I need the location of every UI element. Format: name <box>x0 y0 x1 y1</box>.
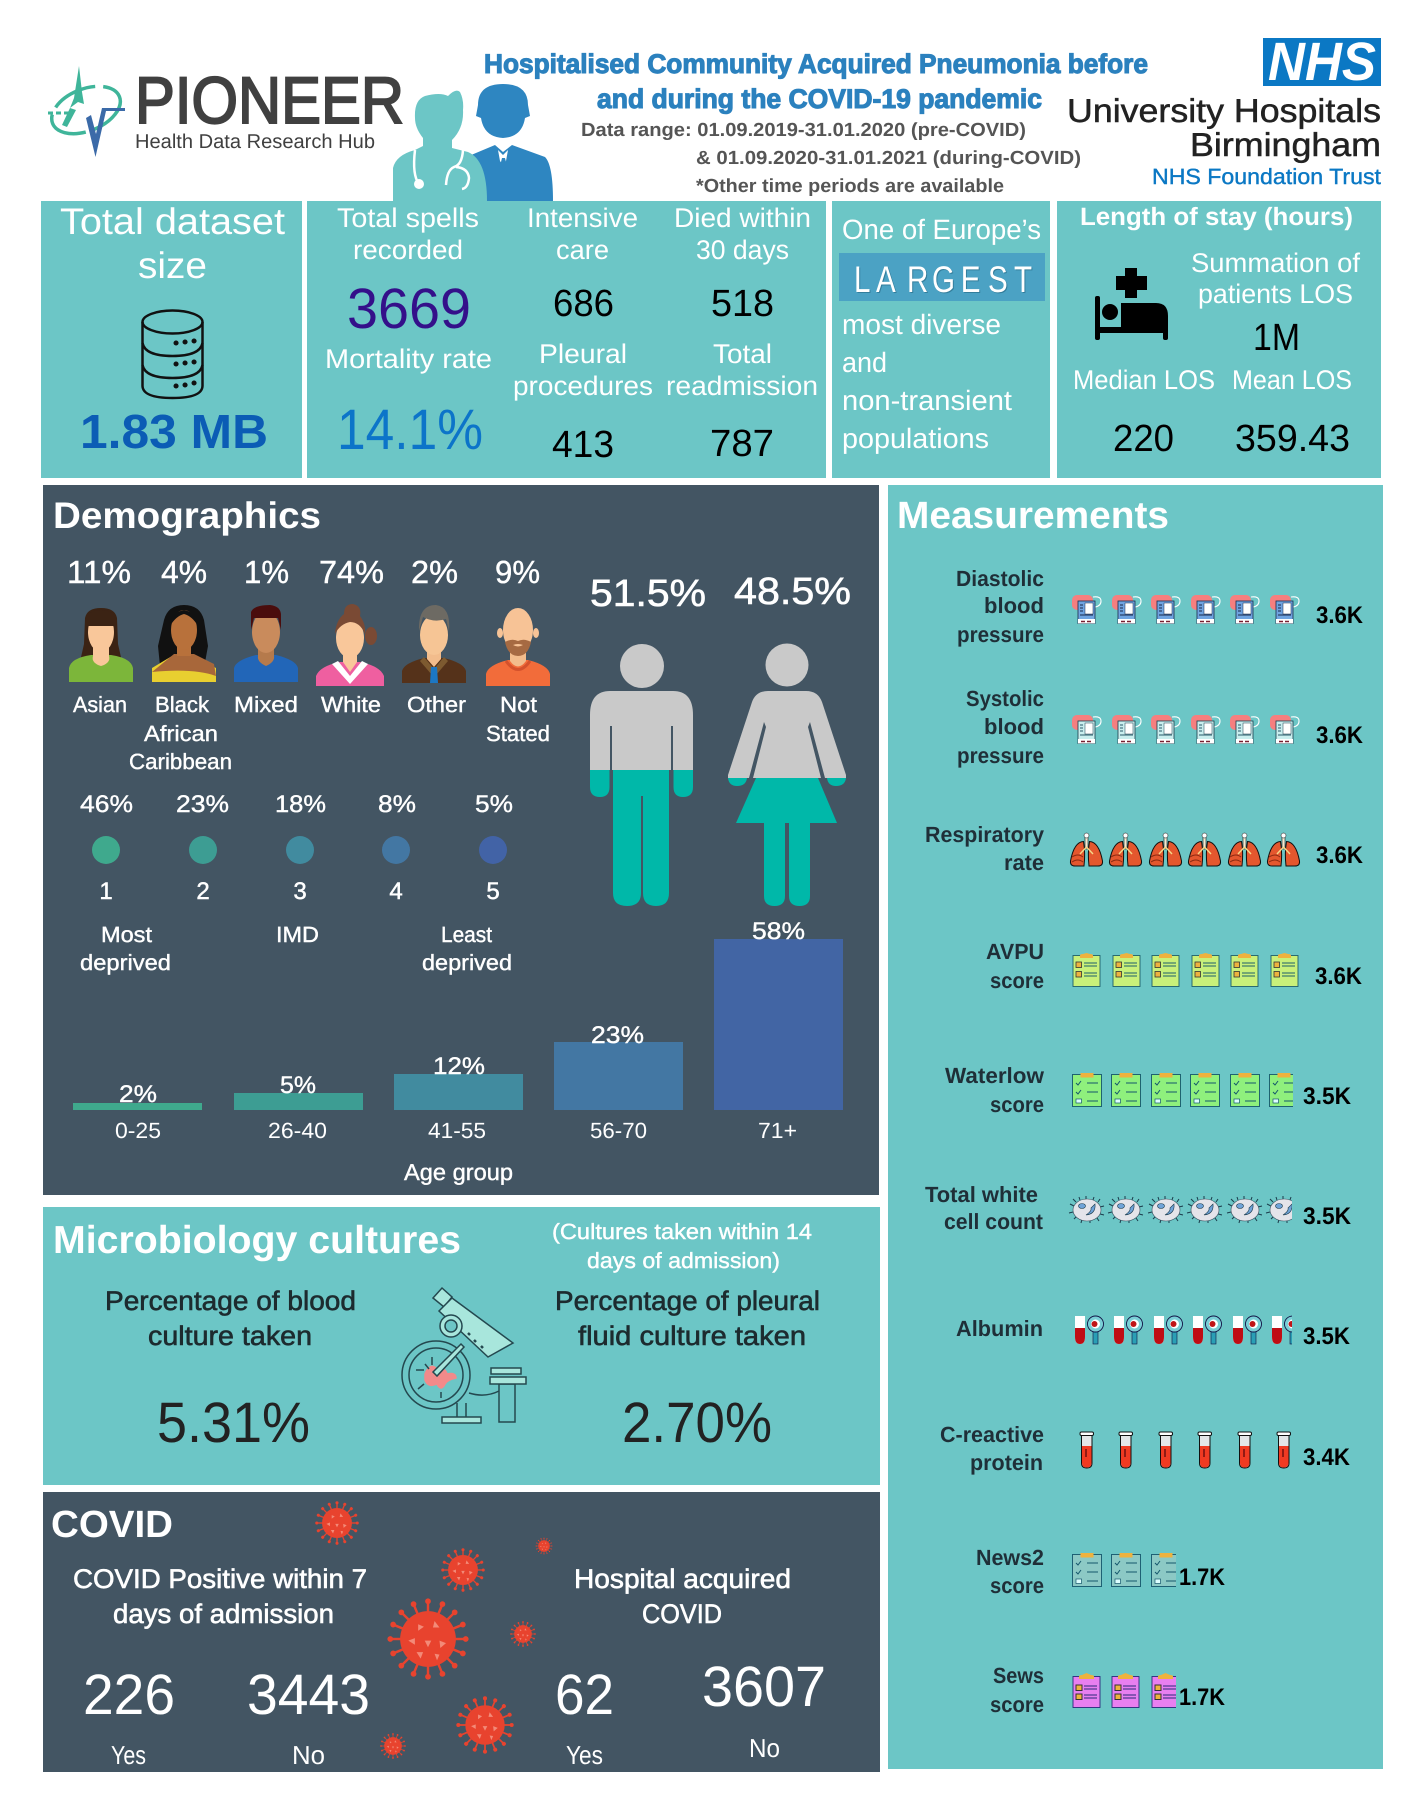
NHS badge: NHS <box>1268 32 1376 92</box>
title <box>484 49 1148 114</box>
stat: hospital acquired COVID: Yes <box>566 1740 603 1770</box>
stat: mortality rate: 14.1% <box>337 398 483 462</box>
row: total white cell count: 3.5K <box>1303 1203 1352 1230</box>
icon: hospital bed <box>1095 268 1168 340</box>
stat: pleural procedures: Pleural <box>539 339 627 369</box>
row: Waterlow score: 3.5K <box>1303 1083 1352 1110</box>
stat: mortality rate <box>325 344 492 462</box>
IMD percentages: 23% <box>176 791 229 818</box>
badge: largest: LARGEST <box>854 259 1032 300</box>
row: Waterlow score: score <box>990 1092 1044 1117</box>
IMD numbers: 1 <box>99 878 113 905</box>
stat: pleural fluid culture: Percentage of pleural <box>555 1286 820 1316</box>
stat: died within 30 days: 30 days <box>696 235 789 265</box>
stat: COVID positive within 7 days: days of admission <box>113 1599 334 1629</box>
text: most diverse populations: and <box>842 347 887 378</box>
stat: intensive care: care <box>556 235 609 265</box>
stat: median LOS <box>1073 365 1215 460</box>
logo: NHS University Hospitals Birmingham <box>1067 32 1381 189</box>
heading: Total dataset <box>60 201 286 242</box>
axis labels: 41-55 <box>428 1118 486 1143</box>
panel: COVID <box>43 1492 880 1772</box>
ethnicity percentages: 1% <box>244 554 289 590</box>
IMD percentages: 46% <box>80 791 133 818</box>
bar value labels <box>119 918 805 1108</box>
stat: COVID positive within 7 days: COVID Positive within 7 <box>73 1564 367 1594</box>
row: Sews score: Sews <box>993 1663 1044 1688</box>
IMD captions: deprived <box>80 950 171 975</box>
row: AVPU score: AVPU <box>986 939 1044 964</box>
stat: blood culture <box>105 1286 356 1455</box>
row: total white cell count: cell count <box>944 1209 1044 1234</box>
ethnicity labels: Black <box>155 692 210 717</box>
stat: blood culture: culture taken <box>148 1321 312 1351</box>
text: one of Europe's: One of Europe’s <box>842 214 1041 245</box>
row: News2 score: 1.7K <box>1179 1564 1226 1591</box>
stat: dataset size: 1.83 MB <box>80 406 268 459</box>
female figure <box>728 571 851 906</box>
axis labels: 26-40 <box>268 1118 327 1143</box>
heading: Length of stay (hours) <box>1080 203 1353 231</box>
text: most diverse populations: non-transient <box>842 385 1012 416</box>
row: diastolic blood pressure <box>956 566 1364 647</box>
stat: blood culture: 5.31% <box>157 1391 310 1455</box>
row: albumin: 3.5K <box>1303 1323 1351 1350</box>
stat: median LOS: 220 <box>1113 418 1174 460</box>
stat: hospital acquired COVID: Hospital acquired <box>574 1564 791 1594</box>
note: days of admission) <box>587 1248 780 1273</box>
panel: largest most diverse <box>832 201 1050 478</box>
wordmark: PIONEER <box>135 63 404 137</box>
ethnicity labels: Caribbean <box>129 749 232 774</box>
IMD percentages: 18% <box>275 791 326 818</box>
ethnicity labels <box>73 692 550 774</box>
stat: intensive care <box>527 203 638 325</box>
row: diastolic blood pressure: pressure <box>957 622 1044 647</box>
ethnicity percentages: 11% <box>67 554 131 590</box>
ethnicity labels: White <box>321 692 381 717</box>
row: systolic blood pressure: 3.6K <box>1316 722 1364 749</box>
row: Sews score: score <box>990 1692 1044 1717</box>
heading: Microbiology cultures <box>53 1219 461 1262</box>
row: AVPU score: score <box>990 968 1044 993</box>
stat: intensive care: 686 <box>553 283 614 325</box>
stat: summation of LOS: 1M <box>1253 317 1300 359</box>
stat: summation of LOS: patients LOS <box>1198 279 1353 309</box>
IMD captions: Most <box>101 922 152 947</box>
stat: summation of LOS <box>1191 248 1361 359</box>
IMD deprivation scale <box>80 791 513 975</box>
logo: PIONEER Health Data Research Hub <box>45 63 404 157</box>
row: C-reactive protein: 3.4K <box>1303 1444 1351 1471</box>
title: Hospitalised Community Acquired Pneumonia before <box>484 49 1148 79</box>
stat: summation of LOS: Summation of <box>1191 248 1361 278</box>
bar value labels: 2% <box>119 1081 157 1108</box>
row: albumin <box>956 1316 1350 1344</box>
bar value labels: 12% <box>433 1053 485 1080</box>
stat: intensive care: Intensive <box>527 203 638 233</box>
icon: Not Stated avatar <box>486 608 550 686</box>
ethnicity percentages: 74% <box>319 554 384 590</box>
stat: COVID positive within 7 days: 226 <box>83 1663 175 1727</box>
heading <box>60 201 286 286</box>
row: respiratory rate <box>925 822 1364 875</box>
stat: pleural procedures: 413 <box>552 424 614 466</box>
stat: hospital acquired COVID: COVID <box>642 1599 722 1629</box>
axis labels <box>115 1118 797 1143</box>
ethnicity labels: Not <box>500 692 537 717</box>
male figure: 51.5% <box>590 573 706 615</box>
stat: pleural procedures <box>513 339 653 466</box>
axis labels: 56-70 <box>590 1118 647 1143</box>
row: Sews score: 1.7K <box>1179 1684 1226 1711</box>
stat: hospital acquired COVID <box>555 1564 826 1770</box>
stat: total readmission <box>666 339 818 465</box>
axis labels: 71+ <box>758 1118 797 1143</box>
stat: died within 30 days: Died within <box>674 203 811 233</box>
row: systolic blood pressure: blood <box>984 714 1044 739</box>
stat: mortality rate: Mortality rate <box>325 344 492 374</box>
ethnicity labels: Other <box>407 692 466 717</box>
badge: largest: LARGEST <box>855 260 1033 301</box>
stat: mean LOS <box>1232 365 1352 460</box>
icon: virus particles <box>315 1501 552 1759</box>
IMD numbers: 3 <box>293 878 307 905</box>
stat: total readmission: readmission <box>666 371 818 401</box>
ethnicity labels: Stated <box>486 721 550 746</box>
stat: total readmission: Total <box>713 339 772 369</box>
row: systolic blood pressure: Systolic <box>966 686 1044 711</box>
panel: measurements <box>888 485 1383 1769</box>
bar value labels: 23% <box>591 1022 644 1049</box>
panel: total dataset size <box>41 201 302 478</box>
stat: hospital acquired COVID: 62 <box>555 1663 614 1727</box>
chart: age group bars <box>73 918 843 1185</box>
male figure <box>590 573 706 906</box>
stat: hospital acquired COVID: No <box>749 1733 780 1763</box>
IMD numbers: 5 <box>486 878 500 905</box>
row: C-reactive protein: protein <box>970 1450 1043 1475</box>
stat: died within 30 days: 518 <box>711 283 774 325</box>
row: respiratory rate: rate <box>1004 850 1044 875</box>
chart: gender split figures <box>590 571 851 906</box>
stat: pleural fluid culture: fluid culture taken <box>578 1321 806 1351</box>
stat: COVID positive within 7 days: 3443 <box>247 1663 370 1727</box>
stat: total spells: Total spells <box>337 203 479 233</box>
icon: PIONEER star mark <box>45 66 127 157</box>
panel: microbiology cultures <box>43 1207 880 1485</box>
stat: mean LOS: 359.43 <box>1235 418 1350 460</box>
note <box>552 1219 812 1273</box>
stat: blood culture: Percentage of blood <box>105 1286 356 1316</box>
female figure: 48.5% <box>734 571 851 613</box>
row: albumin: Albumin <box>956 1316 1043 1341</box>
row: systolic blood pressure <box>957 686 1364 768</box>
note: (Cultures taken within 14 <box>552 1219 812 1244</box>
bar value labels: 58% <box>752 918 805 945</box>
stat: total readmission: 787 <box>710 423 774 465</box>
IMD numbers: 4 <box>389 878 403 905</box>
IMD percentages: 8% <box>378 791 416 818</box>
subtitle: data range: *Other time periods are available <box>696 176 1004 197</box>
row: total white cell count: Total white <box>925 1182 1038 1207</box>
heading: COVID <box>51 1504 173 1546</box>
row: Waterlow score: Waterlow <box>945 1063 1045 1088</box>
row: News2 score: News2 <box>976 1545 1044 1570</box>
IMD captions: Least <box>441 922 492 947</box>
stat: mean LOS: Mean LOS <box>1232 365 1352 395</box>
stat: total spells: recorded <box>353 235 463 265</box>
trust name: University Hospitals <box>1067 92 1381 129</box>
icon: microscope <box>402 1288 526 1423</box>
title: and during the COVID-19 pandemic <box>597 84 1042 114</box>
icon: Mixed avatar <box>234 605 298 682</box>
bar value labels: 5% <box>280 1072 316 1099</box>
axis labels: 0-25 <box>115 1118 161 1143</box>
stat: pleural fluid culture <box>555 1286 820 1455</box>
IMD numbers <box>99 878 500 905</box>
IMD percentages: 5% <box>475 791 513 818</box>
row: C-reactive protein: C-reactive <box>940 1422 1044 1447</box>
text: most diverse populations <box>842 309 1012 454</box>
stat: COVID positive within 7 days: Yes <box>111 1740 146 1770</box>
trust name: NHS Foundation Trust <box>1152 164 1381 189</box>
row: News2 score: score <box>990 1573 1044 1598</box>
stat: COVID positive within 7 days <box>73 1564 370 1770</box>
subtitle: data range: & 01.09.2020-31.01.2021 (during-COVID) <box>696 148 1081 169</box>
icon: White avatar <box>316 604 384 686</box>
panel: headline counts <box>307 201 826 478</box>
axis title: Age group <box>404 1159 513 1185</box>
heading: Measurements <box>897 495 1169 537</box>
row: AVPU score <box>986 939 1363 993</box>
row: respiratory rate: 3.6K <box>1316 842 1364 869</box>
IMD dots <box>92 836 507 864</box>
ethnicity percentages <box>67 554 540 590</box>
ethnicity labels: Mixed <box>234 692 298 717</box>
stat: total spells <box>337 203 479 341</box>
row: diastolic blood pressure: blood <box>984 593 1044 618</box>
stat: hospital acquired COVID: 3607 <box>702 1655 826 1719</box>
IMD percentages <box>80 791 513 818</box>
icon: Asian avatar <box>69 608 133 682</box>
stat: total spells: 3669 <box>347 277 471 341</box>
IMD captions: deprived <box>422 950 512 975</box>
ethnicity labels: Asian <box>73 692 127 717</box>
ethnicity percentages: 9% <box>495 554 540 590</box>
subtitle: data range: Data range: 01.09.2019-31.01.2020 (pre-COVID) <box>581 120 1026 141</box>
row: respiratory rate: Respiratory <box>925 822 1045 847</box>
trust name: Birmingham <box>1190 126 1381 163</box>
row: systolic blood pressure: pressure <box>957 743 1044 768</box>
panel: length of stay <box>1057 201 1381 478</box>
icon: doctor silhouettes <box>393 84 553 201</box>
tagline: Health Data Research Hub <box>135 131 375 153</box>
icon: Other avatar <box>402 605 466 683</box>
text: most diverse populations: most diverse <box>842 309 1001 340</box>
IMD captions: IMD <box>276 922 319 947</box>
ethnicity percentages: 2% <box>411 554 458 590</box>
row: Sews score <box>990 1668 1225 1712</box>
stat: pleural fluid culture: 2.70% <box>622 1391 772 1455</box>
row: total white cell count <box>925 1186 1351 1230</box>
stat: died within 30 days <box>674 203 811 325</box>
icon: Black African Caribbean avatar <box>152 605 216 682</box>
row: diastolic blood pressure: Diastolic <box>956 566 1044 591</box>
stat: pleural procedures: procedures <box>513 371 653 401</box>
subtitle: data range <box>581 120 1081 197</box>
row: News2 score <box>977 1550 1225 1594</box>
row: AVPU score: 3.6K <box>1315 963 1363 990</box>
ethnicity labels: African <box>144 721 218 746</box>
ethnicity percentages: 4% <box>161 554 207 590</box>
stat: COVID positive within 7 days: No <box>292 1740 325 1770</box>
heading: size <box>138 245 207 286</box>
IMD numbers: 2 <box>196 878 210 905</box>
text: most diverse populations: populations <box>842 423 989 454</box>
row: Waterlow score <box>945 1067 1351 1112</box>
IMD captions <box>80 922 512 975</box>
heading: Demographics <box>53 495 321 536</box>
trust name <box>1067 92 1381 189</box>
icon: database <box>142 310 202 398</box>
panel: demographics <box>43 485 879 1195</box>
row: diastolic blood pressure: 3.6K <box>1316 602 1364 629</box>
stat: median LOS: Median LOS <box>1073 365 1215 395</box>
row: C-reactive protein <box>940 1422 1351 1475</box>
